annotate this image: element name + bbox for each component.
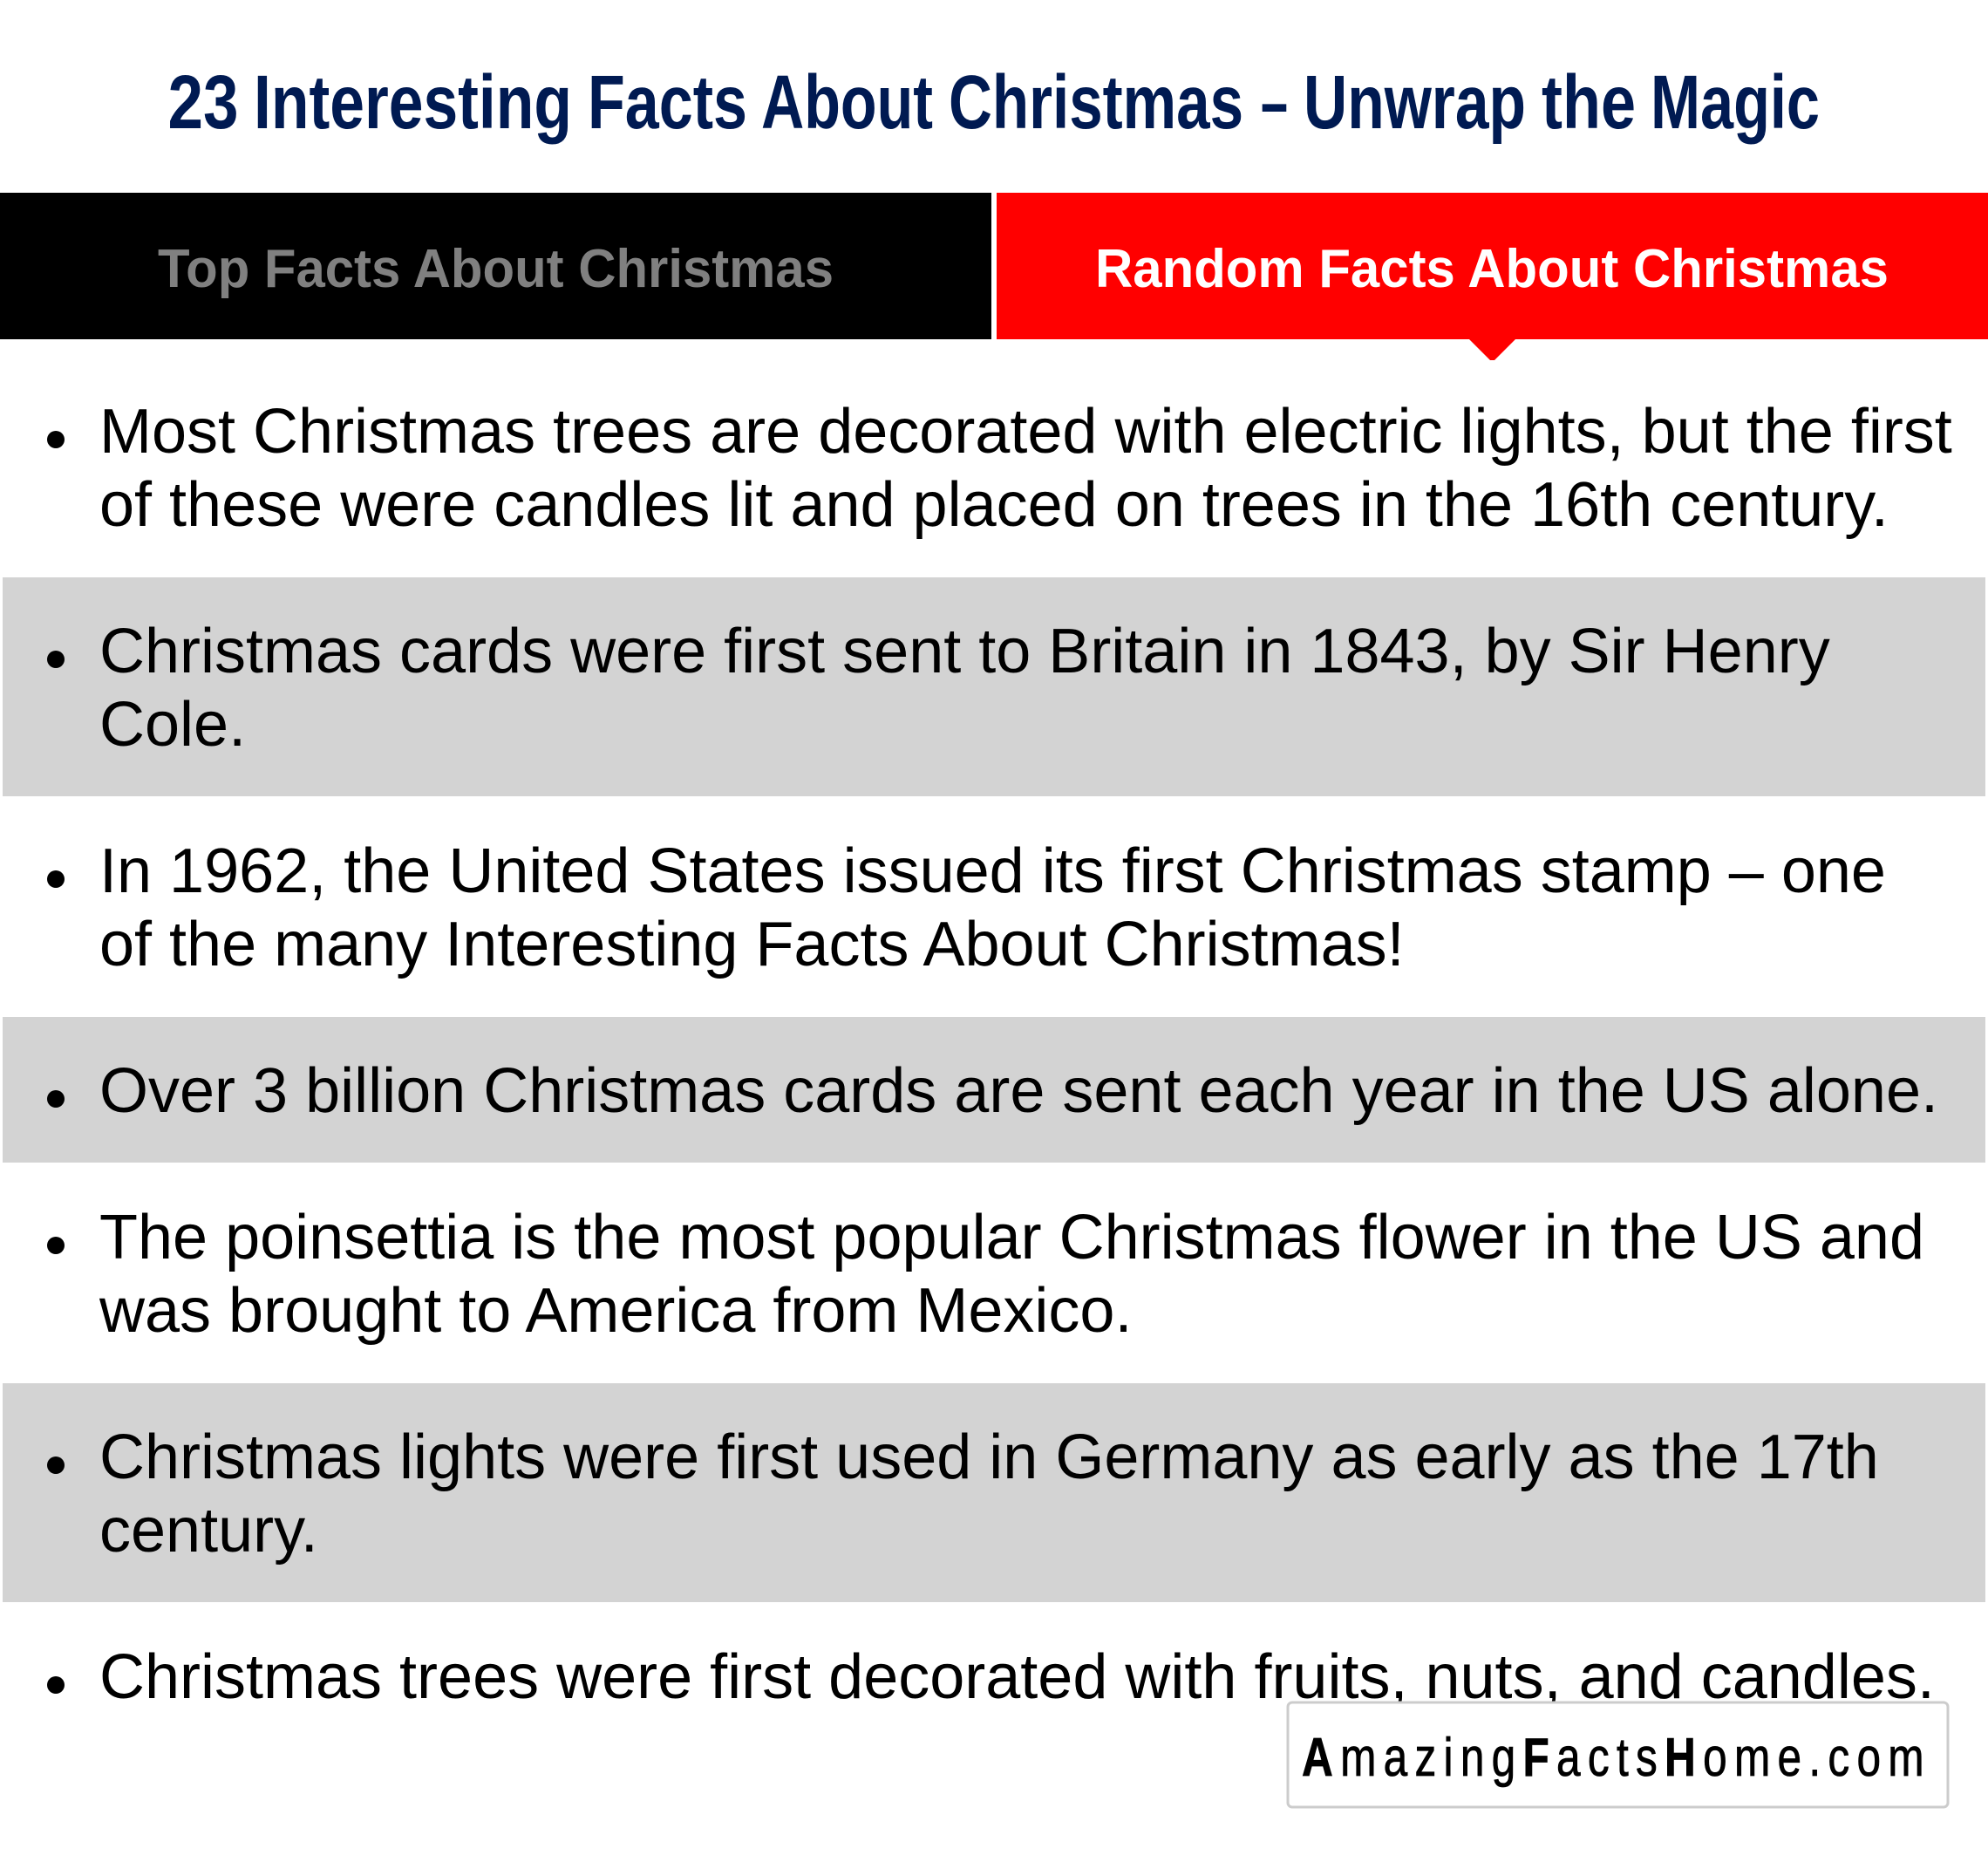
fact 1: Most Christmas trees are decorated with electric lights, but the first (99, 397, 1952, 467)
title: Facts (588, 60, 747, 145)
watermark: AmazingFactsHome.com: AmazingFactsHome.com (1302, 1727, 1924, 1787)
title: – (1261, 60, 1288, 145)
fact 5 (47, 1203, 1924, 1346)
fact 6 (3, 1383, 1985, 1602)
fact 6: century. (99, 1496, 318, 1566)
watermark: AmazingFactsHome.com (1288, 1702, 1948, 1807)
fact 2: Christmas cards were first sent to Britain in 1843, by Sir Henry (99, 617, 1830, 686)
title: Unwrap (1304, 60, 1526, 145)
tab: top facts: Top Facts About Christmas (158, 239, 834, 299)
fact 1 (47, 397, 1952, 540)
fact 1: of these were candles lit and placed on trees in the 16th century. (99, 470, 1889, 540)
fact 2: Cole. (99, 690, 246, 760)
fact 2 (3, 577, 1985, 796)
fact 3: In 1962, the United States issued its first Christmas stamp – one (99, 836, 1886, 906)
fact 4 (3, 1017, 1985, 1163)
title: About (761, 60, 933, 145)
fact 3 (47, 836, 1886, 979)
title: the (1542, 60, 1636, 145)
title: 23 (167, 60, 239, 145)
tab: top facts (0, 193, 991, 339)
fact 6: Christmas lights were first used in Germany as early as the 17th (99, 1422, 1879, 1492)
title: Magic (1651, 60, 1820, 145)
fact 4: Over 3 billion Christmas cards are sent each year in the US alone. (99, 1056, 1938, 1126)
title (167, 60, 1820, 145)
title: Interesting (254, 60, 572, 145)
fact 5: was brought to America from Mexico. (99, 1276, 1132, 1346)
fact 7: Christmas trees were first decorated with fruits, nuts, and candles. (99, 1642, 1935, 1712)
fact 5: The poinsettia is the most popular Christmas flower in the US and (99, 1203, 1924, 1272)
title: Christmas (949, 60, 1243, 145)
fact 3: of the many Interesting Facts About Christmas! (99, 910, 1405, 979)
tab: random facts (active) (997, 193, 1988, 360)
tab: random facts (active): Random Facts About Christmas (1095, 239, 1889, 299)
